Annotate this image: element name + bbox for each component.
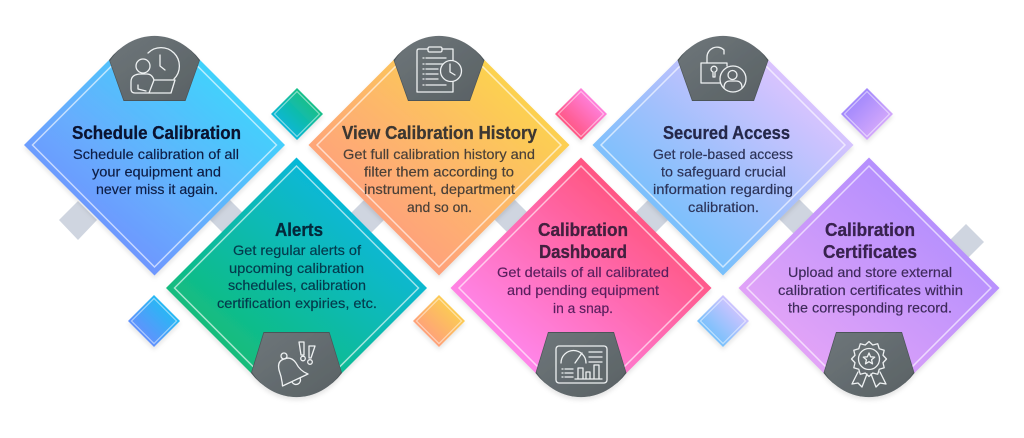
icon: clipboard with clock xyxy=(417,47,462,92)
text: Alerts description: certification expiries, etc. xyxy=(217,295,377,311)
connector square: between dashboard and access xyxy=(632,196,672,236)
heading: Calibration Dashboard: Calibration xyxy=(538,220,628,240)
panel: Calibration Certificates xyxy=(738,158,1000,397)
panel: Secured Access xyxy=(592,36,854,276)
text: History description: Get full calibration history and xyxy=(343,146,535,162)
heading: Calibration Certificates: Calibration xyxy=(825,220,915,240)
connector square: far left xyxy=(59,201,97,240)
heading: Calibration Certificates xyxy=(823,220,917,262)
text: Alerts description xyxy=(217,242,377,311)
text: Access description: Get role-based access xyxy=(653,146,793,162)
text: Alerts description: Get regular alerts of xyxy=(233,242,361,258)
panel: Alerts xyxy=(166,158,427,397)
panel: View Calibration History xyxy=(308,36,570,276)
text: History description: filter them according to xyxy=(364,164,514,180)
small diamond: purple xyxy=(841,88,893,140)
text: Schedule description: Schedule calibration of all xyxy=(73,146,239,162)
text: Access description: to safeguard crucial xyxy=(661,164,786,180)
heading: Schedule Calibration: Schedule Calibration xyxy=(72,123,241,143)
text: History description: and so on. xyxy=(407,199,472,215)
text: Schedule description: never miss it again. xyxy=(96,181,218,197)
text: Certificates description: Upload and store external xyxy=(788,264,952,280)
text: History description xyxy=(343,146,535,215)
icon: bell with exclamation marks xyxy=(279,342,315,386)
connector square: between schedule and alerts xyxy=(206,196,246,236)
icon: dashboard screen xyxy=(556,346,607,383)
text: Certificates description: calibration certificates within xyxy=(778,282,963,298)
small diamond: light blue xyxy=(697,295,749,347)
text: Access description: calibration. xyxy=(688,199,759,215)
heading: Calibration Certificates: Certificates xyxy=(823,242,917,262)
small diamond: orange xyxy=(413,295,465,347)
heading: Calibration Dashboard: Dashboard xyxy=(539,242,627,262)
text: Dashboard description: and pending equipment xyxy=(507,282,659,298)
text: Certificates description: the corresponding record. xyxy=(788,300,952,316)
connector square: between alerts and history xyxy=(348,196,388,236)
text: Dashboard description xyxy=(497,264,669,316)
icon: person with clock and laptop xyxy=(131,48,179,93)
connector square: far right xyxy=(948,224,984,260)
small diamond: blue xyxy=(128,295,180,347)
connector square: between access and certificates xyxy=(776,196,816,236)
panel: Calibration Dashboard xyxy=(450,158,712,397)
heading: View Calibration History: View Calibration History xyxy=(342,123,537,143)
small diamond: teal xyxy=(271,88,323,140)
icon: award badge xyxy=(852,342,886,387)
text: Certificates description xyxy=(778,264,963,316)
panel: Schedule Calibration xyxy=(24,36,285,276)
text: History description: instrument, department xyxy=(364,181,515,197)
small diamond: pink xyxy=(555,88,607,140)
text: Schedule description xyxy=(73,146,239,197)
heading: Calibration Dashboard xyxy=(538,220,628,262)
text: Alerts description: schedules, calibration xyxy=(228,277,366,293)
text: Schedule description: your equipment and xyxy=(92,164,221,180)
heading: Secured Access: Secured Access xyxy=(663,123,790,143)
icon: open lock with user xyxy=(701,47,746,92)
text: Dashboard description: in a snap. xyxy=(553,300,613,316)
heading: Alerts: Alerts xyxy=(275,220,323,240)
connector square: between history and dashboard xyxy=(491,196,531,236)
text: Alerts description: upcoming calibration xyxy=(229,260,364,276)
text: Access description xyxy=(653,146,793,215)
text: Dashboard description: Get details of all calibrated xyxy=(497,264,669,280)
text: Access description: information regarding xyxy=(653,181,793,197)
